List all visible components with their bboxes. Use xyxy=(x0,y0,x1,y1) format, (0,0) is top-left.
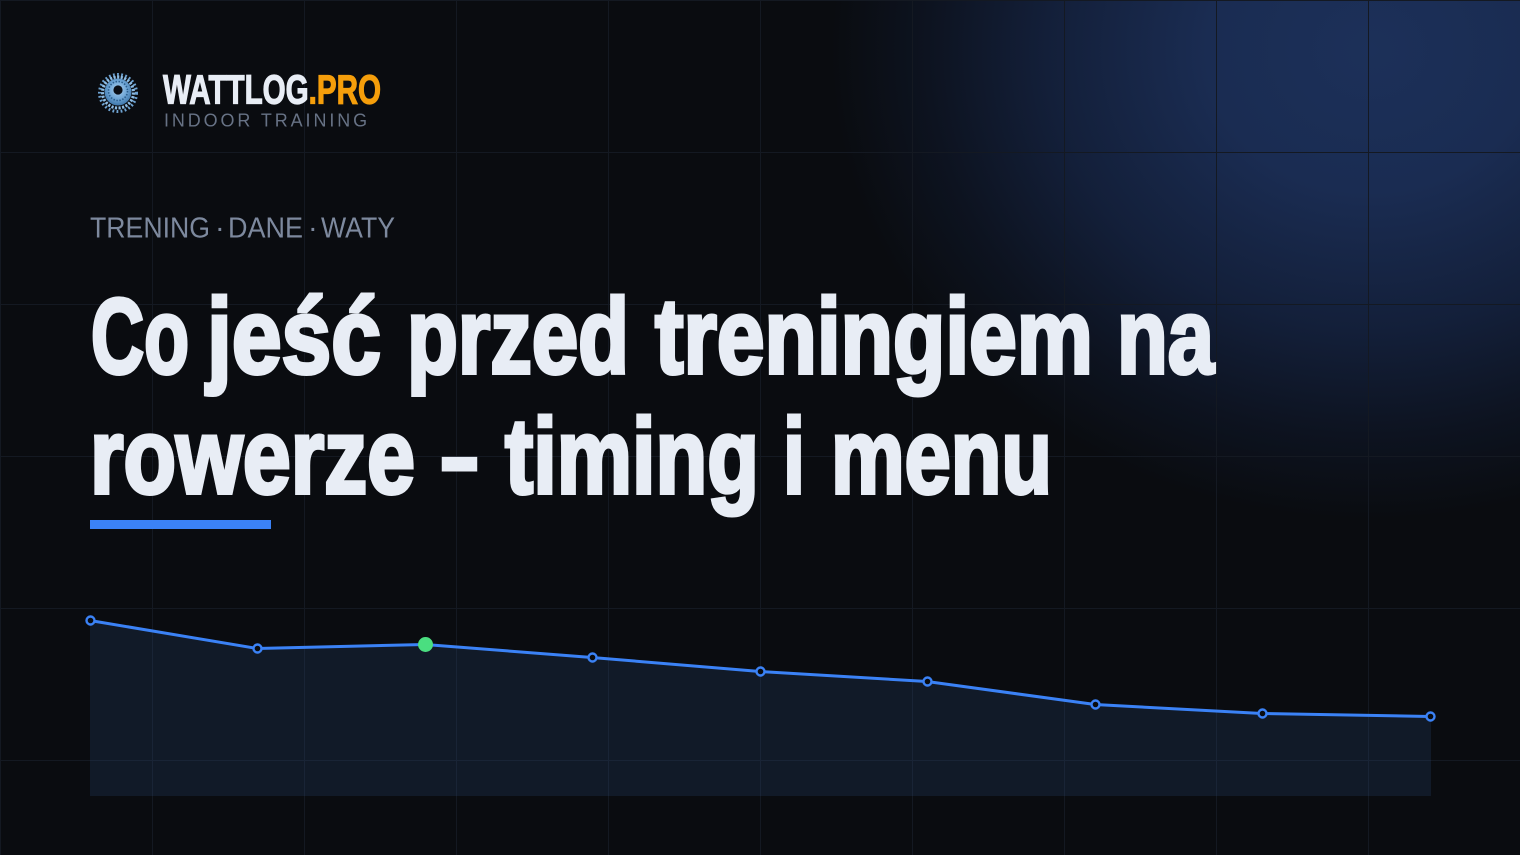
line chart xyxy=(86,616,1434,796)
title accent underline xyxy=(90,520,271,529)
brand name: WATTLOG.PRO xyxy=(163,66,381,112)
title: rowerze xyxy=(90,396,415,516)
title: – xyxy=(441,396,478,516)
title xyxy=(90,276,1215,516)
chart area fill xyxy=(90,620,1431,796)
eyebrow text: DANE xyxy=(228,212,303,244)
title: menu xyxy=(831,396,1052,516)
eyebrow text: · xyxy=(215,212,225,244)
title: i xyxy=(783,396,805,516)
chart line xyxy=(90,620,1430,716)
logo xyxy=(100,66,381,130)
highlighted data point xyxy=(418,637,433,652)
data points xyxy=(86,616,1434,720)
title: na xyxy=(1117,276,1215,396)
title: timing xyxy=(505,396,759,516)
eyebrow text: WATY xyxy=(321,212,395,244)
title: przed xyxy=(407,276,629,396)
title: jeść xyxy=(205,276,381,396)
icon: bicycle cassette xyxy=(100,74,136,112)
brand tagline: INDOOR TRAINING xyxy=(164,110,370,130)
title: treningiem xyxy=(655,276,1093,396)
eyebrow text: · xyxy=(308,212,318,244)
eyebrow text: TRENING xyxy=(90,212,210,244)
title: Co xyxy=(91,276,189,396)
eyebrow text xyxy=(90,212,395,244)
